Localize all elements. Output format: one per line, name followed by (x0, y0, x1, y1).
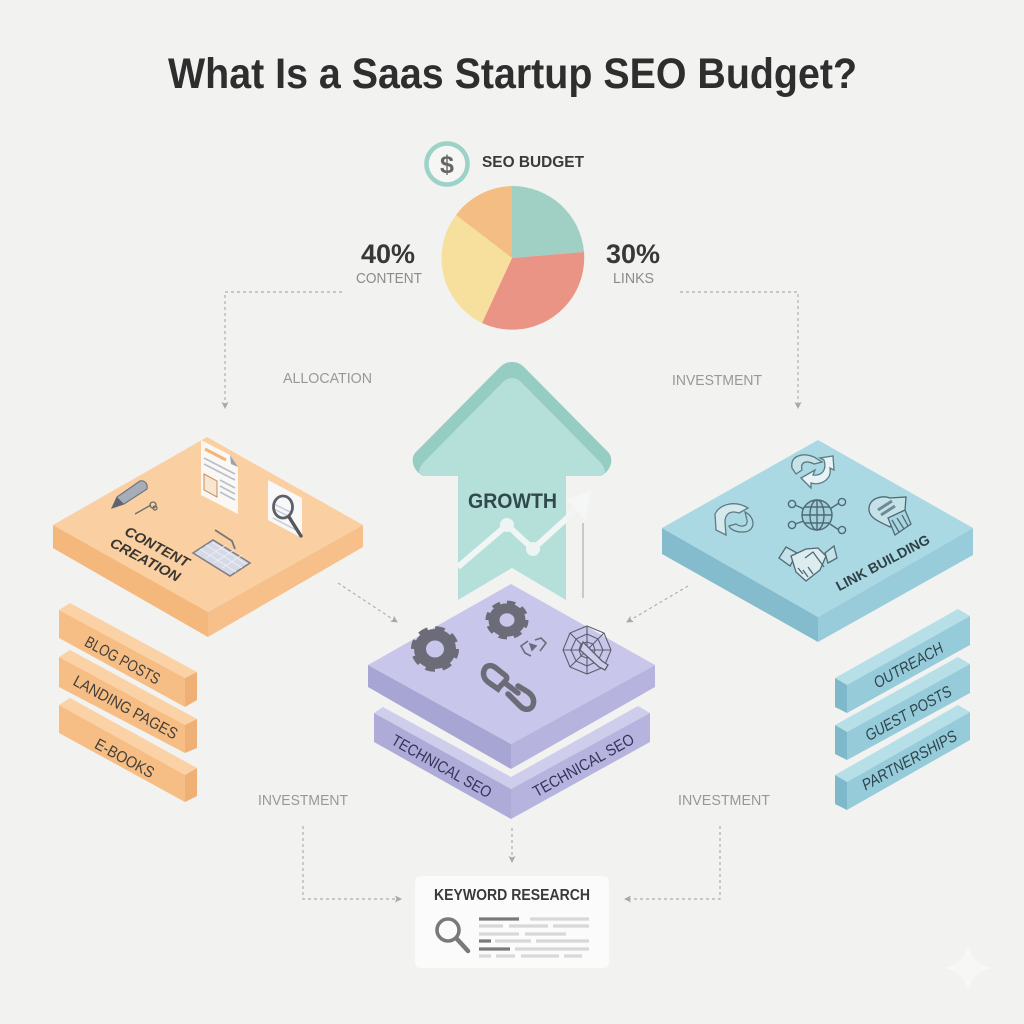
icon: handshake (779, 546, 837, 581)
panel: link building (662, 440, 973, 642)
panel: content creation (53, 437, 363, 637)
bar: outreach: OUTREACH (871, 640, 947, 692)
bar: e-books (59, 698, 197, 802)
list: content items (59, 603, 197, 802)
icon: sparkle watermark (944, 944, 992, 992)
label: content creation: CONTENT (122, 523, 194, 571)
arrow: investment connector (680, 292, 798, 408)
bar: landing pages (59, 650, 197, 753)
icon: building hand (869, 497, 911, 535)
icon: gear right (488, 603, 526, 637)
icon: magnifier (437, 919, 468, 951)
stat: 40% content (356, 239, 422, 287)
arrow: technical to keyword (511, 828, 513, 862)
panel: technical seo (368, 584, 655, 819)
label: investment left: INVESTMENT (258, 793, 348, 809)
icon: dollar badge: $ (440, 151, 454, 179)
icon: document (201, 440, 238, 514)
icon: refresh top (792, 455, 834, 488)
arrow: left to keyword (303, 826, 401, 899)
label: investment right: INVESTMENT (678, 793, 770, 809)
panel: keyword research (415, 876, 609, 968)
label: keyword research: KEYWORD RESEARCH (434, 887, 590, 904)
icon: spider web wrench (563, 626, 611, 674)
bar: blog posts (59, 603, 197, 707)
title: What Is a Saas Startup SEO Budget? (168, 51, 857, 98)
icon: gear left (414, 630, 456, 668)
icon: scissors (135, 502, 157, 514)
text lines (479, 919, 589, 956)
icon: magnifier on paper (268, 480, 302, 538)
bar: guest posts (835, 657, 970, 760)
icon: refresh left (715, 504, 753, 535)
label: allocation: ALLOCATION (283, 371, 372, 387)
bar: partnerships (835, 705, 970, 810)
arrow: allocation connector (225, 292, 342, 408)
label: growth: GROWTH (468, 490, 557, 513)
technical seo lower layer: TECHNICAL SEO (530, 731, 637, 801)
icon: globe network (788, 498, 846, 534)
list: link items (835, 609, 970, 810)
bar: blog posts: BLOG POSTS (82, 634, 163, 688)
arrow: links to technical (627, 586, 688, 622)
bar: partnerships: PARTNERSHIPS (859, 728, 961, 794)
pie chart (442, 186, 584, 330)
label: investment top: INVESTMENT (672, 373, 762, 389)
label: link building: LINK BUILDING (833, 531, 932, 594)
icon: pen (112, 481, 147, 508)
growth trend line (458, 491, 591, 598)
label: content creation (108, 523, 194, 585)
icon: small link (521, 638, 546, 656)
bar: landing pages: LANDING PAGES (70, 673, 180, 743)
technical seo lower layer (374, 706, 650, 819)
heading: SEO budget: SEO BUDGET (482, 154, 584, 171)
stat: 30% links (606, 239, 660, 287)
icon: dollar badge (426, 144, 468, 184)
bar: outreach (835, 609, 970, 713)
bar: guest posts: GUEST POSTS (863, 683, 955, 745)
arrow: content to technical (338, 583, 397, 622)
arrow: right to keyword (625, 826, 720, 899)
bar: e-books: E-BOOKS (92, 736, 157, 782)
icon: chain (484, 666, 534, 709)
stat: 30% links: 30% (606, 239, 660, 269)
stat: 40% content: CONTENT (356, 270, 422, 287)
icon: keyboard (193, 530, 250, 576)
label: content creation: CREATION (108, 534, 184, 585)
stat: 30% links: LINKS (613, 270, 654, 287)
stat: 40% content: 40% (361, 239, 415, 269)
growth arrow (413, 362, 611, 600)
technical seo lower layer: TECHNICAL SEO (388, 732, 494, 802)
